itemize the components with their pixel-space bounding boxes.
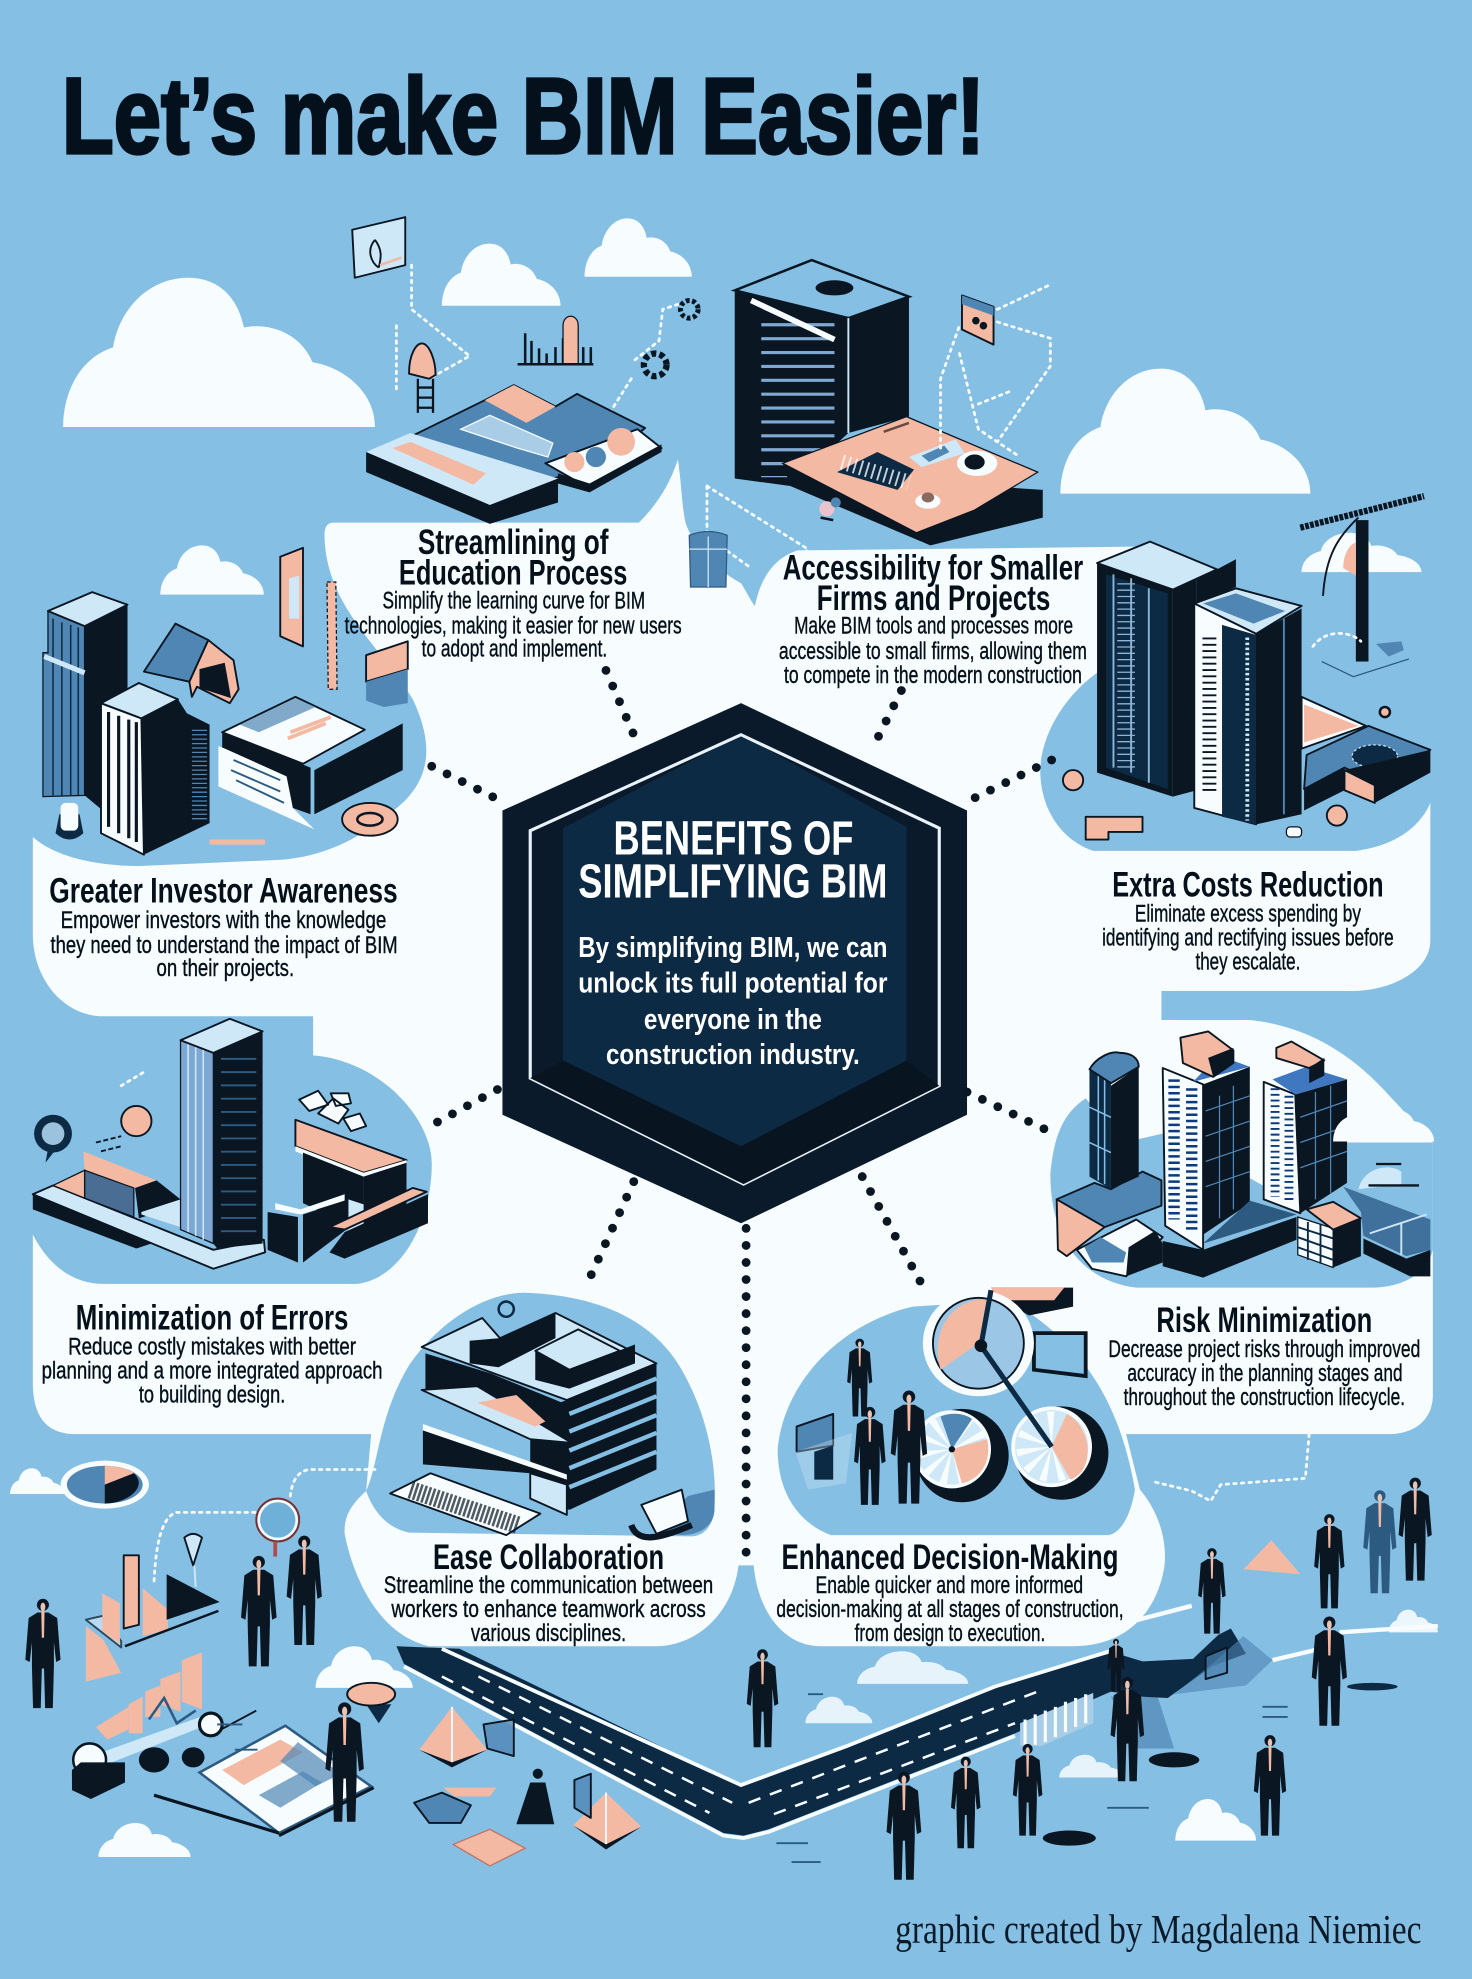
card: ease collaboration: various disciplines.: [471, 1620, 626, 1647]
card: greater investor awareness: Greater Investor Awareness: [49, 872, 398, 911]
document box: [218, 697, 403, 829]
hexagon: centre panel: [502, 703, 967, 1223]
small dome: [1358, 1164, 1419, 1189]
folder roof: [144, 624, 239, 703]
right panel: [1034, 1333, 1086, 1376]
illustration: cost reduction buildings and crane: [1063, 496, 1430, 840]
pyramids and road props: [217, 1540, 1398, 1866]
illustration: minimization of errors: [33, 1019, 428, 1269]
peach desk: [783, 417, 1043, 545]
card: streamlining of education process: [345, 523, 682, 662]
icon: peach pin with ladder: [409, 343, 436, 413]
card: enhanced decision-making: Enhanced Decision-Making: [781, 1538, 1119, 1577]
bottom left: pie chart and dotted links: [61, 1461, 375, 1583]
card: greater investor awareness: [49, 872, 398, 982]
bottom scene: clouds: [10, 1468, 1438, 1857]
pen: [210, 840, 265, 844]
card: accessibility: Make BIM tools and processes more: [794, 613, 1073, 640]
dotted connectors: [423, 670, 1052, 1555]
card: extra costs reduction: [1102, 865, 1394, 976]
magnifier dial: [923, 1288, 1073, 1447]
hexagon body text: unlock its full potential for: [578, 967, 887, 999]
bottom scene: road: [396, 1606, 1438, 1838]
card: greater investor awareness: they need to understand the impact of BIM: [50, 932, 398, 959]
card: ease collaboration: Ease Collaboration: [433, 1538, 664, 1577]
card: minimization of errors: planning and a more integrated approach: [42, 1358, 383, 1385]
icon: gears: [644, 300, 698, 376]
card: enhanced decision-making: decision-making at all stages of construction,: [776, 1596, 1124, 1623]
white central panel with all benefit cards: [33, 460, 1433, 1646]
card: ease collaboration: workers to enhance teamwork across: [391, 1596, 706, 1623]
card: ease collaboration: Streamline the communication between: [384, 1572, 713, 1599]
plan table: [366, 385, 662, 524]
back wheels: [913, 1406, 1108, 1502]
screen block: [53, 1151, 181, 1227]
platforms: [1302, 697, 1430, 810]
small figure decoration: [819, 497, 841, 520]
isometric tower: [735, 260, 909, 486]
illustration: education process: [352, 217, 698, 524]
icon: speech pins, coin and note cubes: [34, 1071, 366, 1163]
hexagon body text: construction industry.: [606, 1039, 860, 1071]
crane: [1300, 496, 1424, 677]
tall blue tower: [43, 592, 128, 808]
illustration: investor awareness buildings: [43, 548, 408, 855]
right blocks: [268, 1120, 428, 1262]
mini bar chart: [518, 316, 593, 364]
hexagon heading: SIMPLIFYING BIM: [578, 856, 887, 909]
hexagon heading: [578, 813, 887, 909]
blue backdrop: decision-making illustration: [778, 1300, 1135, 1535]
layered right stack: [530, 1363, 656, 1510]
base and grid box: [1163, 1201, 1361, 1278]
card: accessibility: to compete in the modern construction: [784, 662, 1082, 689]
icon: coin: [342, 803, 398, 836]
icon: bottle: [56, 803, 83, 840]
card: ease collaboration: [384, 1538, 713, 1647]
small props: [1063, 707, 1390, 840]
card: accessibility: Accessibility for Smaller: [783, 548, 1083, 587]
people figures: [25, 1339, 1432, 1880]
bar chart group upper: [86, 1555, 220, 1682]
icon: magnifier lens: [256, 1499, 299, 1557]
hexagon body text: By simplifying BIM, we can: [578, 932, 887, 964]
tower: central: [1163, 1031, 1250, 1250]
skyscraper: [181, 1019, 263, 1249]
tower: dome: [1089, 1052, 1139, 1189]
card: streamlining of education process: to adopt and implement.: [422, 635, 607, 662]
blue backdrop: risk illustration: [1050, 1098, 1433, 1288]
card: risk minimization: Risk Minimization: [1156, 1301, 1372, 1340]
desk phone: [631, 1490, 715, 1537]
card: extra costs reduction: they escalate.: [1196, 949, 1300, 976]
icon: blue bin: [689, 531, 727, 587]
bar chart group lower: [72, 1653, 256, 1799]
clouds: sky background: [63, 218, 1310, 595]
card: streamlining of education process: Simplify the learning curve for BIM: [383, 587, 645, 614]
blue backdrop: collaboration illustration: [366, 1293, 715, 1536]
top floor: [422, 1302, 656, 1424]
card: enhanced decision-making: from design to execution.: [855, 1620, 1045, 1647]
base slab: [33, 1185, 265, 1269]
card: enhanced decision-making: Enable quicker and more informed: [816, 1572, 1083, 1599]
illustration: decision-making bicycle: [795, 1288, 1108, 1502]
card: risk minimization: [1108, 1301, 1420, 1411]
dotted trail at right: [1155, 1434, 1309, 1501]
card: greater investor awareness: on their projects.: [157, 955, 294, 982]
card: minimization of errors: to building design.: [139, 1382, 285, 1409]
peach tags: [280, 548, 337, 689]
right pad: [1343, 1187, 1430, 1276]
white building right: [1194, 588, 1302, 824]
card: extra costs reduction: Eliminate excess spending by: [1135, 901, 1361, 928]
hexagon heading: BENEFITS OF: [614, 813, 853, 866]
funnel marker: [347, 1683, 395, 1723]
card: minimization of errors: Reduce costly mistakes with better: [68, 1334, 356, 1361]
info panel: [366, 641, 408, 707]
mid floor: [422, 1386, 572, 1515]
white tower: [101, 683, 210, 855]
card: accessibility: [779, 548, 1087, 689]
doors: [795, 1414, 852, 1490]
card: minimization of errors: Minimization of Errors: [76, 1298, 348, 1337]
title: Let’s make BIM Easier!: [62, 56, 985, 176]
icon: tablet card: [352, 217, 405, 278]
illustration: accessibility tower and desk: [689, 260, 1052, 587]
cloud over tower: [1333, 1095, 1434, 1141]
laptop keyboard: [390, 1473, 540, 1535]
card: streamlining of education process: technologies, making it easier for new users: [345, 613, 682, 640]
card: enhanced decision-making: [776, 1538, 1124, 1647]
icon: peach window card: [962, 295, 994, 345]
card: accessibility: accessible to small firms, allowing them: [779, 638, 1087, 665]
icon: map pin: [184, 1534, 202, 1587]
card: accessibility: Firms and Projects: [817, 579, 1050, 618]
tall building left: [1097, 542, 1236, 797]
tower: right: [1264, 1042, 1347, 1213]
hexagon body text: everyone in the: [644, 1004, 822, 1036]
peach cylinder and pads: [1057, 1172, 1163, 1276]
card: streamlining of education process: Streamlining of: [418, 523, 609, 562]
card: streamlining of education process: Education Process: [399, 554, 627, 593]
map sheet: [154, 1726, 374, 1836]
illustration: collaboration building: [390, 1302, 715, 1537]
card: minimization of errors: [42, 1298, 383, 1409]
hexagon body text: [578, 932, 887, 1071]
card: greater investor awareness: Empower investors with the knowledge: [61, 907, 386, 934]
illustration: risk minimization: [1057, 1031, 1434, 1278]
